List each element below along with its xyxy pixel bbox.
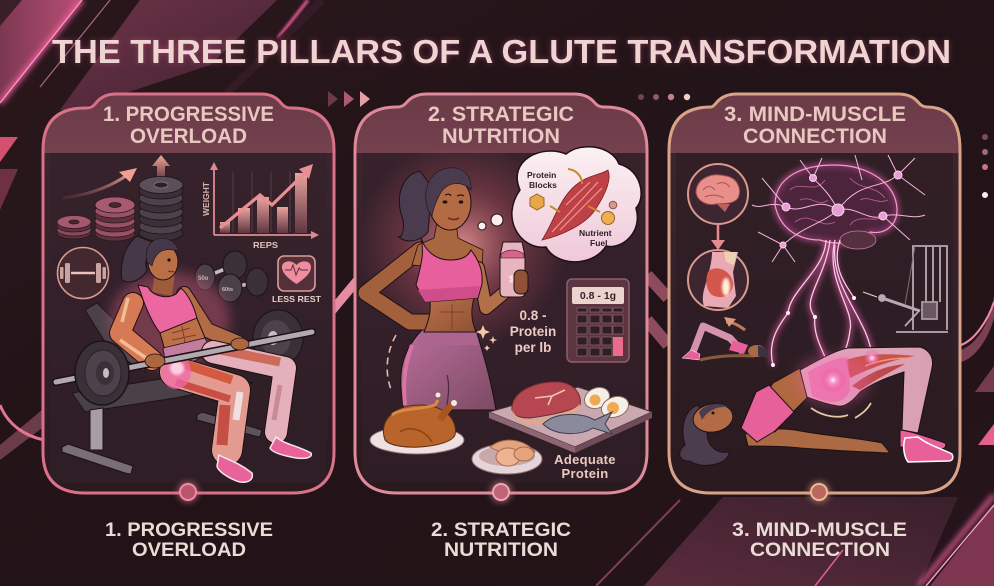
panel connector node (808, 481, 830, 503)
text: protein blocks (527, 170, 557, 190)
panel connector node (490, 481, 512, 503)
text: protein per lb (510, 308, 556, 355)
far shoe (900, 430, 946, 449)
far leg (213, 352, 285, 432)
head (429, 176, 471, 230)
heading: mind-muscle connection: CONNECTION (743, 124, 887, 148)
heading: progressive overload (103, 102, 274, 148)
dots: right (982, 134, 988, 198)
text: adequate protein: Protein (562, 466, 608, 481)
bottom label: progressive overload: OVERLOAD (132, 539, 246, 561)
illustration: small glute bridge (682, 317, 768, 360)
panel: strategic nutrition (355, 94, 652, 503)
brain outline (775, 165, 897, 243)
illustration: hands on bar (145, 338, 249, 368)
illustration: cable machine (863, 246, 948, 332)
icon: heart rate badge (272, 256, 322, 304)
icon: rising curve arrow (63, 168, 137, 198)
icon: small plate stack (57, 216, 91, 239)
leggings (401, 330, 496, 410)
sneakers (217, 455, 252, 482)
heading: mind-muscle connection: 3. MIND-MUSCLE (724, 102, 906, 126)
icon: nutrient spheres (602, 201, 617, 224)
illustration: bench (62, 303, 262, 474)
bottom label: mind-muscle connection: CONNECTION (750, 539, 890, 561)
curved dashed motion line (387, 335, 396, 392)
heading: strategic nutrition (428, 102, 574, 148)
chart: weight vs reps (202, 162, 319, 250)
text: protein blocks: Protein (527, 170, 556, 180)
nerve lines (771, 240, 872, 380)
text: nutrient fuel: Nutrient (579, 228, 612, 238)
food: chicken breast plate (472, 440, 542, 474)
bottom label: strategic nutrition (431, 519, 571, 561)
text: protein per lb: 0.8 - (519, 308, 547, 323)
shorts (163, 338, 212, 372)
chart: weight vs reps: REPS (253, 240, 278, 250)
icon: three dumbbells: 50o (198, 276, 209, 282)
glow behind woman (357, 140, 567, 350)
illustration: glute bridge woman (680, 347, 953, 465)
panel: mind-muscle connection (669, 94, 960, 503)
illustration: barbell (56, 332, 312, 405)
leg and hip (800, 347, 932, 433)
near arm muscles (120, 303, 152, 360)
bottom label: strategic nutrition: NUTRITION (444, 539, 558, 561)
icon: heart rate badge: LESS REST (272, 294, 322, 304)
motion arcs (811, 403, 871, 418)
torso (424, 298, 476, 332)
food: fish (543, 412, 612, 434)
icon: three dumbbells (195, 251, 268, 302)
arrows into muscle (550, 169, 600, 212)
panel: progressive overload (43, 94, 334, 503)
midriff (745, 368, 808, 432)
heading: progressive overload: OVERLOAD (130, 124, 247, 148)
panel connector node (177, 481, 199, 503)
bottom label: mind-muscle connection: 3. MIND-MUSCLE (732, 519, 907, 541)
text: adequate protein (554, 452, 616, 481)
neural brain (752, 155, 925, 380)
glute glow (808, 357, 850, 402)
right arm (478, 268, 510, 308)
icon: calculator (567, 279, 629, 362)
glute highlight (161, 355, 191, 389)
ponytail (121, 236, 157, 282)
heading: progressive overload: 1. PROGRESSIVE (103, 102, 274, 126)
neurons (780, 171, 902, 248)
icon: glute badge (688, 250, 748, 310)
midriff abs (158, 316, 208, 354)
background shards: bottom right (596, 495, 994, 586)
icon: brain badge (688, 164, 748, 224)
background shards: top left (0, 0, 322, 110)
icon: three dumbbells: 60ts (222, 287, 233, 293)
icon: up arrow (152, 155, 170, 178)
side ribbons and triangles (0, 137, 994, 460)
illustration: barbell rear plate (253, 310, 303, 366)
icon: sparkles (476, 325, 497, 351)
dots: top (638, 94, 690, 100)
arm (745, 429, 890, 453)
heading: strategic nutrition: 2. STRATEGIC (428, 102, 574, 126)
far arm (184, 294, 238, 343)
near leg (175, 372, 235, 450)
icon: large plate stack (139, 176, 183, 241)
icon: calculator: 0.8 - 1g (580, 290, 616, 302)
food: roast chicken (370, 392, 464, 454)
text: nutrient fuel (579, 228, 612, 248)
food: eggs (581, 383, 632, 421)
arrow: brain to glute (711, 224, 725, 250)
torso glow (110, 272, 230, 368)
bottom label: progressive overload: 1. PROGRESSIVE (105, 519, 273, 541)
text: protein per lb: Protein (510, 324, 556, 339)
bottom label: strategic nutrition: 2. STRATEGIC (431, 519, 571, 541)
ponytail (398, 171, 434, 241)
text: protein blocks: Blocks (529, 180, 557, 190)
icon: medium plate stack (95, 197, 135, 241)
bottom label: mind-muscle connection (732, 519, 907, 561)
head (691, 401, 735, 435)
sports top (416, 238, 482, 302)
illustration: standing woman with shaker (366, 168, 528, 410)
text: protein per lb: per lb (515, 340, 551, 355)
near shoe (904, 437, 953, 462)
neck and shoulders (412, 222, 483, 270)
hair (680, 405, 729, 465)
food: steak (512, 382, 580, 418)
thought bubble (478, 147, 641, 262)
chevrons (328, 91, 370, 107)
icon: protein hexagon (530, 194, 544, 210)
title: THE THREE PILLARS OF A GLUTE TRANSFORMATION (52, 34, 951, 71)
text: adequate protein: Adequate (554, 452, 616, 467)
illustration: standing woman with shaker: $ (509, 274, 514, 284)
neck and head (152, 272, 175, 296)
sports top (741, 385, 794, 442)
neural glow (771, 165, 897, 380)
title: THE THREE PILLARS OF A GLUTE TRANSFORMATION (52, 34, 951, 71)
food: protein tray (489, 382, 652, 453)
illustration: seated woman with muscle map (110, 236, 311, 482)
heading: mind-muscle connection (724, 102, 906, 148)
shaker (500, 242, 525, 297)
bottom label: progressive overload (105, 519, 273, 561)
text: nutrient fuel: Fuel (590, 238, 607, 248)
icon: dumbbell badge (58, 248, 108, 298)
muscle diagram (542, 170, 609, 240)
sports top (138, 285, 197, 333)
left arm (366, 250, 440, 322)
dendrites (752, 155, 925, 262)
heading: strategic nutrition: NUTRITION (442, 124, 560, 148)
chart: weight vs reps: WEIGHT (202, 182, 211, 216)
